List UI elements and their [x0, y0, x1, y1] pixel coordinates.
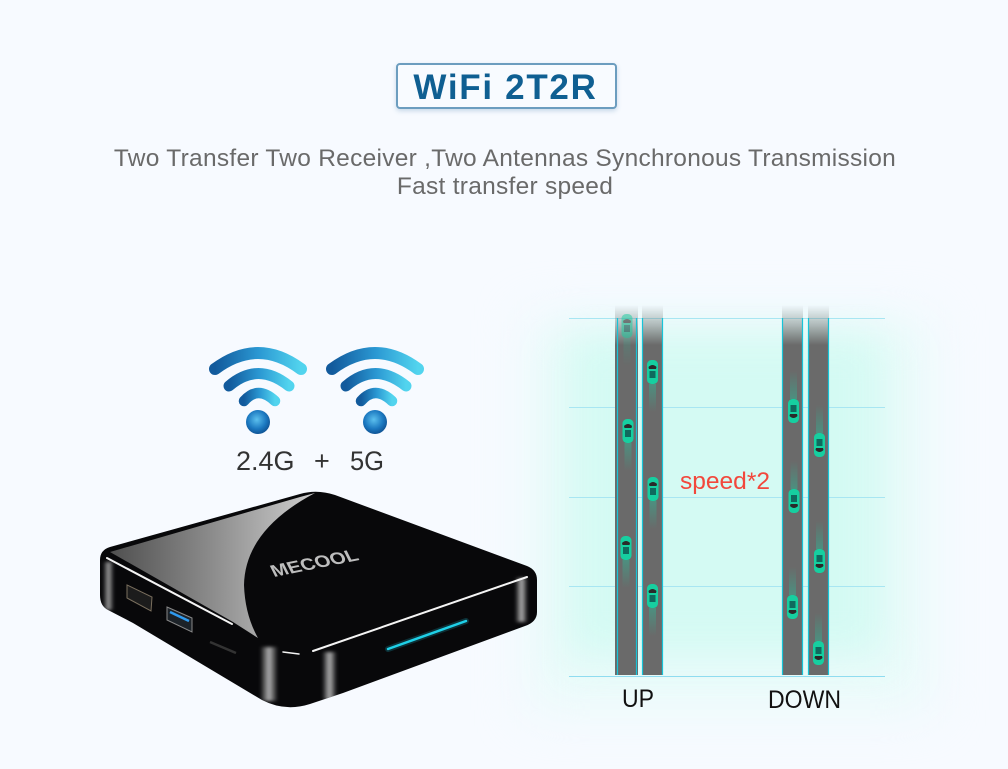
TF slot	[210, 642, 236, 653]
icon: wifi 2.4G	[215, 353, 301, 434]
device: TV box	[100, 492, 537, 707]
road group: UP	[615, 305, 663, 675]
band labels: 5G	[350, 446, 384, 476]
subtitle text	[114, 145, 896, 200]
DOWN label: DOWN	[768, 686, 841, 714]
UP label: UP	[622, 685, 654, 713]
subtitle text: Fast transfer speed	[397, 173, 613, 200]
chart grid lines	[569, 318, 885, 676]
band labels: +	[314, 446, 330, 476]
title: WiFi 2T2R	[413, 68, 598, 107]
speed label: speed*2	[680, 468, 770, 495]
device body	[100, 492, 537, 707]
USB port 2	[167, 607, 192, 632]
white edge highlights	[107, 558, 527, 654]
LED bar	[388, 621, 466, 649]
band labels: 2.4G	[236, 446, 295, 476]
subtitle text: Two Transfer Two Receiver ,Two Antennas Synchronous Transmission	[114, 145, 896, 172]
panel: faint outer glow	[530, 320, 930, 710]
corner reflections	[103, 562, 528, 701]
road group: DOWN	[782, 305, 829, 675]
USB port 1	[127, 585, 152, 611]
title badge	[396, 63, 617, 109]
band labels	[236, 446, 384, 476]
glossy top reflection	[110, 493, 315, 638]
brand logo: MECOOL	[267, 546, 362, 581]
icon: wifi 5G	[332, 353, 418, 434]
illustration layer	[100, 308, 885, 708]
panel: teal speed glow background	[568, 335, 883, 655]
